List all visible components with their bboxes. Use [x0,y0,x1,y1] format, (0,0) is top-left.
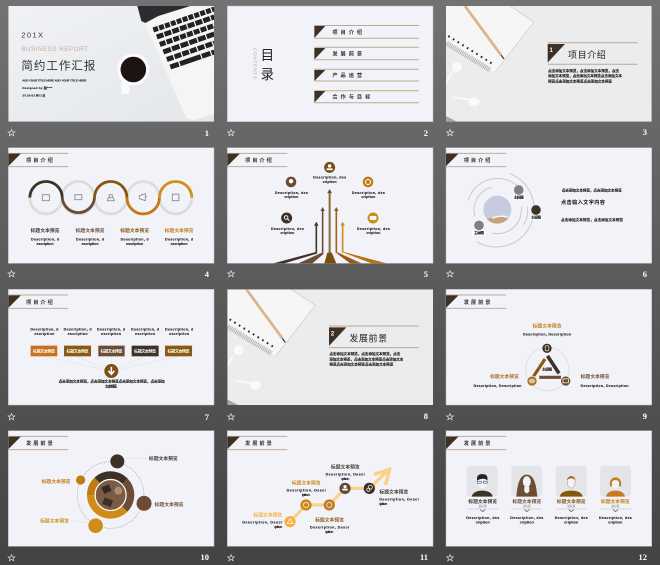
box 3: 标题文本预览 [101,348,123,354]
section header [548,43,638,64]
coffee cup [117,54,149,94]
dotted orbit [77,462,144,528]
box 4 [132,346,159,356]
person 2: cription [520,521,534,525]
person 2: 标题文本预览 [512,498,541,505]
section paragraph: 预览点击添加文本预览点击添加文本预览 [329,362,394,367]
label lower left: Description, des [271,227,304,231]
slide 2: contents [227,6,433,122]
label left [474,373,522,388]
slide 9: triangle [446,289,652,405]
icon lower left [281,212,292,223]
slide header [8,436,68,450]
column 1: escription [37,242,54,246]
slide 11: growth path [227,431,433,546]
section header: 2 [331,331,335,337]
triangle center text: 主标题 [542,366,552,371]
label left: 标题文本预览 [42,478,71,485]
column 1 [31,227,60,246]
column 2: escription [82,242,99,246]
person 4: cription [608,521,622,525]
footer 3: 3 [643,127,647,137]
label left: 标题文本预览 [490,373,519,380]
descriptions: escription [101,332,121,336]
icon upper left [286,177,296,187]
person 2: Description, des [510,516,543,520]
right text: 点击输入文字内容 [561,198,606,206]
footer 5 [228,269,428,279]
menu item 1 [314,26,419,38]
label top [313,176,346,184]
icon top [324,162,335,173]
column 4 [165,227,194,246]
label top [125,455,178,462]
center photo [95,479,126,510]
label lower right: cription [366,231,380,235]
section paragraph: 点击添加文本预览，点击添加文本预览，点击 [548,68,619,73]
label step 2: 标题文本预览 [292,480,321,487]
bottom text [59,379,165,388]
cover details: 2018/01月/1日 [22,92,45,98]
bottom text: 点击添加文本预览，点击添加文本预览点击添加文本预览，点击添加 [59,379,165,384]
label step 4: iption [341,477,349,481]
node top [513,185,525,200]
person 4: Description, des [599,516,632,520]
footer 12: 12 [638,552,647,562]
label step 3: Description, Descr [310,526,350,530]
person 1 [466,466,499,525]
footer 1: 1 [205,128,209,138]
label step 5: iption [379,502,387,506]
corner shadow [446,116,457,122]
column 2: Description, d [76,238,104,242]
outer ring [526,347,569,391]
section header: 1 [550,48,554,54]
footer 8 [228,411,428,421]
label lower left: cription [280,231,294,235]
node top: 主标题 [514,195,524,200]
person 4: 副标题 [611,504,620,508]
contents title: 录 [261,67,274,82]
descriptions: escription [68,332,88,336]
pencil [465,6,504,59]
person 3: 标题文本预览 [557,498,586,505]
person 1: 副标题 [479,504,487,508]
label top: 标题文本预览 [533,322,562,329]
footer 11: 11 [420,552,428,562]
slide header: 发展前景 [245,439,274,447]
section paragraph: 添加文本预览，点击添加文本预览点击添加文本 [329,356,404,361]
footer 11 [228,552,428,562]
label upper right: cription [361,195,375,199]
slide header [446,153,506,167]
orbit arcs [468,173,534,247]
section header: 项目介绍 [568,49,606,60]
node left [76,475,85,485]
box 2 [64,346,91,356]
slide header: 发展前景 [464,298,492,306]
label step 1: Description, Descr [242,521,283,525]
label step 5: 标题文本预览 [379,488,408,495]
label step 3: iption [325,530,333,534]
label upper left [275,191,308,199]
node right [561,376,571,386]
descriptions: Description, d [131,327,159,331]
earbuds [446,62,480,106]
descriptions: escription [135,332,155,336]
down arrow icon [104,364,118,378]
column 3: escription [126,242,143,246]
menu item 3: 产品运营 [332,71,365,79]
slide 5: arrows [227,148,433,263]
label right: 标题文本预览 [155,501,184,508]
label top: Description, Description [523,333,571,337]
footer 5: 5 [424,269,428,279]
right text: 点击添加文本预览，点击添加文本预览 [561,217,623,222]
footer 7: 7 [205,412,210,422]
cover details: ADD YOUR TITLE HERE ADD YOUR TITLE HERE [22,78,86,82]
corner shadow [227,399,238,405]
bottom text: 文本预览 [105,383,117,388]
label step 2: iption [302,493,310,497]
slide 1: cover [8,6,214,122]
slide header: 发展前景 [26,439,55,447]
label lower right [357,227,390,235]
right text [561,188,623,222]
node left [527,376,537,386]
person 1: cription [476,521,490,525]
icon upper right [363,177,373,187]
footer 4 [8,269,210,279]
slide header [446,436,506,450]
slide header [227,436,287,450]
laptop [137,6,214,120]
triangle bars [534,356,561,377]
descriptions: escription [169,332,189,336]
label upper right [352,191,385,199]
slide header [227,153,287,167]
label right [580,373,628,388]
label right: Description, Description [580,384,628,388]
slide header [446,295,506,308]
person 1: 标题文本预览 [468,498,497,505]
box 3 [98,346,125,356]
label top: Description, des [313,176,346,180]
node right [137,496,152,511]
label lower right: Description, des [357,227,390,231]
cover subtitle: BUSINESS REPORT [21,46,88,53]
menu item 4: 合作与目标 [332,93,373,101]
node bottom: 主标题 [474,230,484,235]
menu item 1: 项目介绍 [332,28,365,36]
descriptions: Description, d [30,327,58,331]
section paragraph [548,68,622,83]
label upper left: cription [284,195,298,199]
icon lower right [368,212,379,223]
label right: 标题文本预览 [581,373,610,380]
section paragraph: 预览点击添加文本预览点击添加文本预览 [548,78,612,83]
footer 2 [228,128,428,138]
slide 6: orbit [446,148,652,263]
label bottom: 标题文本预览 [40,517,69,524]
donut ring [91,475,130,515]
footer 12 [447,552,647,562]
slide header: 项目介绍 [26,298,55,306]
box 2: 标题文本预览 [67,348,89,354]
node middle: 主标题 [531,215,541,220]
contents vertical label: CONTENTS [252,48,257,79]
label step 1: iption [274,525,282,529]
cover details [22,78,86,98]
label bottom [40,517,88,524]
person 3 [555,466,588,525]
cover year: 201X [21,30,44,40]
label upper right: Description, des [352,191,385,195]
footer 9: 9 [643,411,647,421]
menu item 2: 发展前景 [332,50,365,58]
column 1: Description, d [31,238,59,242]
box 4: 标题文本预览 [134,348,156,354]
label step 3: 标题文本预览 [315,517,344,524]
person 3: 副标题 [567,504,575,508]
column 1: 标题文本预览 [31,227,60,234]
person 3: cription [564,521,578,525]
label step 1: 标题文本预览 [253,512,282,519]
slide header: 发展前景 [464,439,492,447]
descriptions: Description, d [97,327,125,331]
node middle [530,205,543,220]
slide 10: ring [8,431,214,546]
step 1 [284,516,296,527]
column 4: 标题文本预览 [165,227,194,234]
contents title [261,48,274,82]
person 3: Description, des [555,516,588,520]
notebook [227,289,315,355]
person 4 [599,466,632,525]
slide header: 项目介绍 [464,156,492,164]
person 2 [510,466,543,525]
label lower left [271,227,304,235]
wave line [30,181,192,214]
node bottom [88,518,103,533]
step 2 [300,499,312,511]
label step 5 [379,488,420,506]
person 2: 副标题 [523,504,531,508]
arrow shafts [314,189,345,254]
gray rings [30,181,192,214]
footer 6: 6 [643,269,647,279]
box 5 [165,346,192,356]
section paragraph: 点击添加文本预览，点击添加文本预览，点击 [329,351,401,356]
slide 4: wave circles [8,148,214,263]
label step 3 [310,517,350,534]
right text: 点击添加文本预览，点击添加文本预览 [562,188,622,193]
label top: 标题文本预览 [149,455,178,462]
descriptions [30,327,193,336]
footer 8: 8 [424,411,428,421]
label left: Description, Description [474,384,522,388]
section paragraph [329,351,404,367]
footer 2: 2 [424,128,428,138]
earbuds [227,345,261,390]
person 4: 标题文本预览 [601,498,630,505]
label step 2: Description, Descr [287,489,327,493]
pencil [246,289,285,342]
label upper left: Description, des [275,191,308,195]
footer 1 [8,128,209,138]
footer 10 [8,552,209,562]
node top [542,343,552,353]
label step 1 [242,512,283,529]
arrow base rays [273,252,387,263]
node bottom [472,221,486,236]
slide 8: section two [227,289,433,405]
menu item 3 [314,69,419,81]
step 4 [339,483,351,494]
column 2: 标题文本预览 [76,227,105,234]
slide header: 项目介绍 [245,156,274,164]
person 1: Description, des [466,516,499,520]
footer 3 [447,127,647,137]
descriptions: escription [34,332,54,336]
path arrow [290,470,389,522]
box 5: 标题文本预览 [168,348,190,354]
footer 6 [447,269,647,279]
connector lines [44,356,178,371]
label step 4 [326,463,366,481]
menu item 4 [314,91,419,103]
column 4: escription [171,242,188,246]
step 5 [364,483,375,494]
label top [523,322,571,337]
footer 7 [8,412,210,422]
label step 4: 标题文本预览 [331,463,360,470]
slide header [8,153,68,167]
slide header [8,295,68,308]
box 1: 标题文本预览 [33,348,55,354]
label step 4: Description, Descr [326,472,366,476]
section header: 发展前景 [349,332,388,343]
cover details: Designed by 图**** [22,85,53,90]
column 3 [120,227,149,246]
section paragraph: 添加文本预览，点击添加文本预览点击添加文本 [548,73,622,78]
column 2 [76,227,105,246]
slide 7: boxes [8,289,214,405]
footer 9 [447,411,647,421]
footer 4: 4 [205,269,210,279]
slide 12: team [446,431,652,546]
contents title: 目 [261,48,274,63]
icons [42,194,179,201]
label top: cription [323,180,337,184]
menu item 2 [314,47,419,60]
center photo [483,196,511,224]
slide header: 项目介绍 [26,156,55,164]
column 4: Description, d [165,238,193,242]
step 3 [324,499,335,511]
column 3: 标题文本预览 [120,227,149,234]
cover title: 简约工作汇报 [21,58,96,72]
column 3: Description, d [121,238,149,242]
node top [110,454,124,468]
label step 5: Description, Descr [379,497,420,501]
section header [329,326,419,348]
descriptions: Description, d [64,327,92,331]
footer 10: 10 [200,552,209,562]
slide 3: section one [446,6,652,122]
descriptions: Description, d [165,327,193,331]
label step 2 [287,480,327,497]
box 1 [31,346,57,356]
notebook [446,6,534,72]
